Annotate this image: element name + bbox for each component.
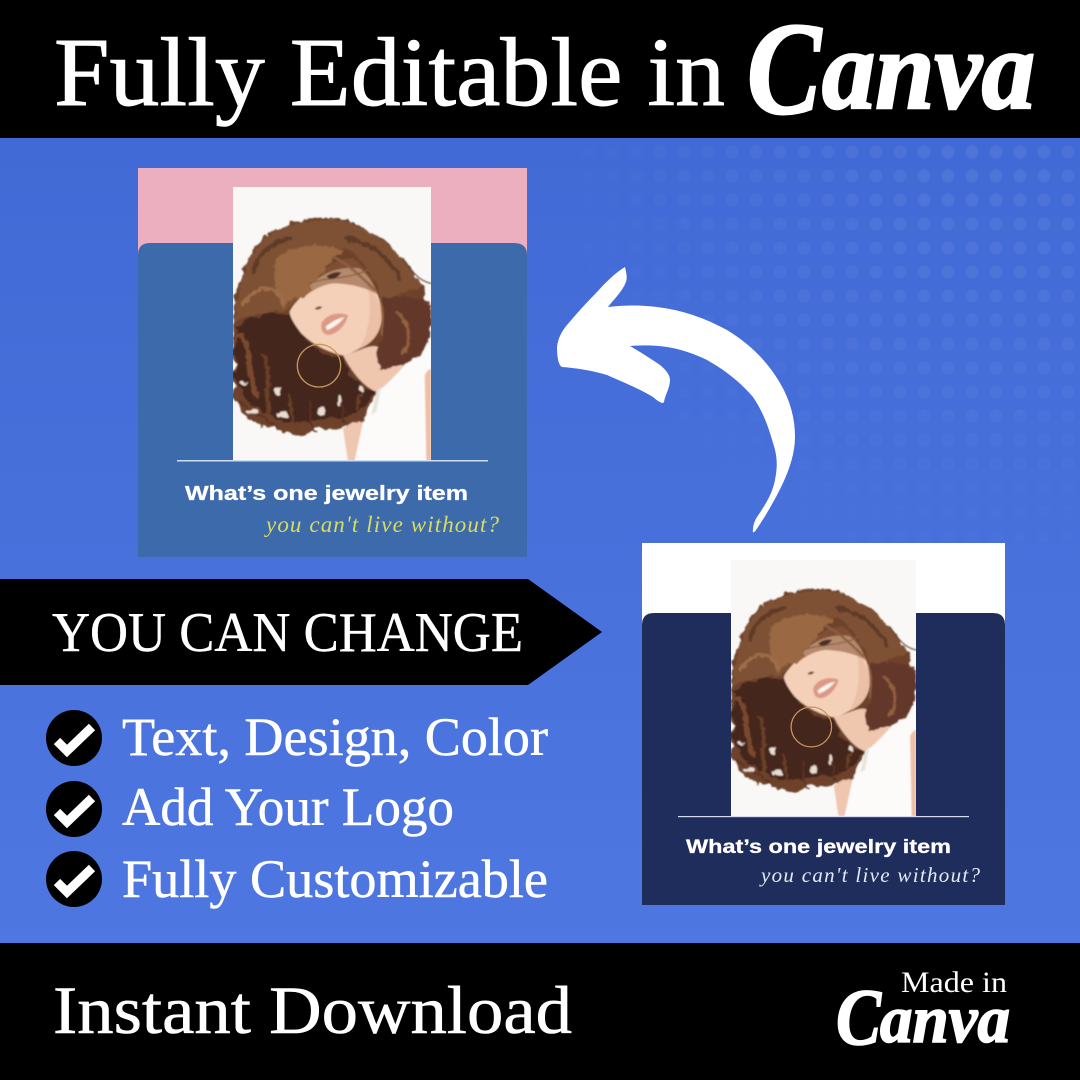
panel: pink and blue template [138,168,527,557]
question headline: What’s one jewelry item [686,837,951,858]
divider line [678,816,969,817]
photo: woman with curly hair [233,187,431,461]
bottom bar [0,943,1080,1080]
panel: white and navy template [642,543,1005,905]
banner: you can change [0,579,602,685]
item: text design color: Text, Design, Color [122,707,548,767]
canva wordmark small: anva [880,981,1010,1057]
made in label: Made in [901,966,1007,999]
feature list [46,707,548,909]
item: fully customizable: Fully Customizable [122,849,548,909]
script subline: you can't live without? [759,863,980,887]
curved arrow [557,267,795,532]
item: add your logo: Add Your Logo [122,777,454,837]
instant download text: Instant Download [53,972,572,1048]
blue card [138,243,527,557]
script subline: you can't live without? [264,512,500,537]
navy card [642,613,1005,905]
canva wordmark: anva [822,8,1035,133]
photo: woman with curly hair [731,560,916,816]
canva wordmark small: C [836,974,882,1062]
banner text: YOU CAN CHANGE [52,602,523,664]
divider line [177,460,488,462]
question headline: What’s one jewelry item [185,483,468,505]
title text: Fully Editable in [54,19,725,127]
halftone dots background [822,146,1074,318]
top title bar [0,0,1080,142]
